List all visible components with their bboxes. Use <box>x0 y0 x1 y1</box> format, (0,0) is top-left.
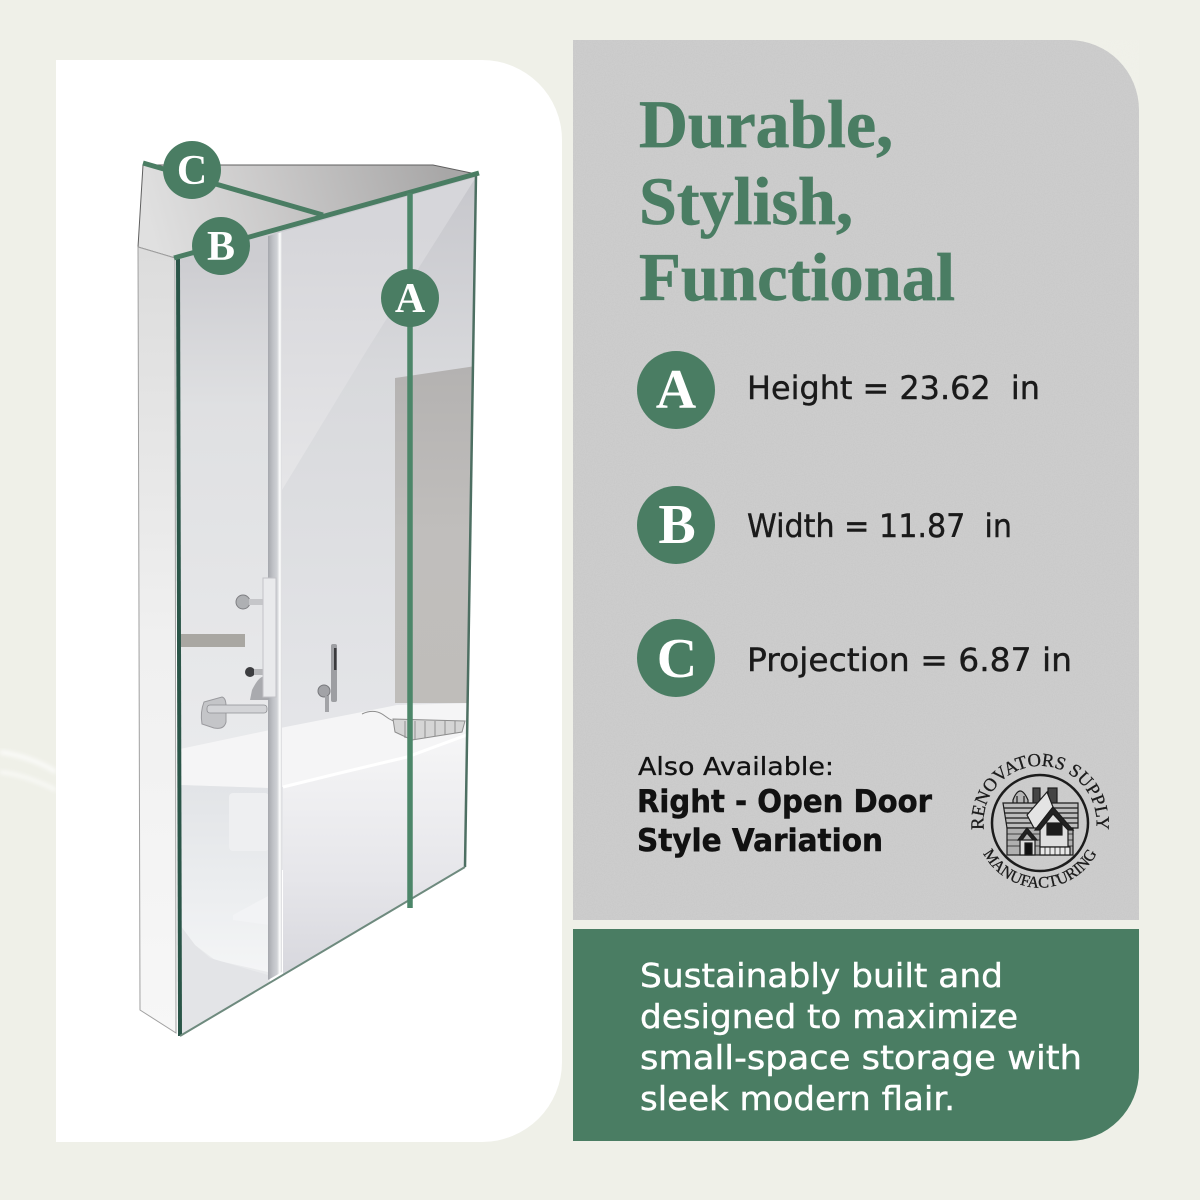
spec: width: B <box>658 494 696 556</box>
reflected fixtures <box>201 595 337 728</box>
spec: height: Height = 23.62 in <box>747 369 1040 407</box>
dimension lines and markers <box>143 141 479 908</box>
panel: product image <box>56 60 562 1142</box>
spec: height: A <box>656 359 697 421</box>
spec: width: Width = 11.87 in <box>747 507 1012 545</box>
reflected towel bar <box>180 634 245 647</box>
line A <box>407 193 413 908</box>
spec: projection: C <box>657 628 697 690</box>
marker B <box>192 217 250 275</box>
line C <box>143 163 323 215</box>
cabinet side panel <box>138 247 176 1033</box>
reflected bathtub <box>180 703 472 788</box>
logo: Renovators Supply Manufacturing <box>971 754 1109 888</box>
marker C <box>163 141 221 199</box>
logo: Renovators Supply Manufacturing: RENOVATORS SUPPLY <box>971 754 1109 830</box>
callout text: small-space storage with <box>640 1038 1082 1077</box>
marker B: B <box>207 224 235 270</box>
heading: Durable, <box>639 86 893 162</box>
background wisps <box>0 752 56 790</box>
callout text: Sustainably built and <box>640 956 1003 995</box>
callout text: designed to maximize <box>640 997 1018 1036</box>
also available note <box>637 752 933 859</box>
reflected tile wall <box>395 366 476 703</box>
marker A: A <box>395 276 426 322</box>
spec: projection <box>637 619 1072 697</box>
also available note: Style Variation <box>637 823 883 859</box>
mirror edges <box>178 175 476 1036</box>
marker C: C <box>177 148 207 194</box>
line B <box>174 173 479 258</box>
mirrored doors <box>180 170 476 1040</box>
reflected canister <box>229 793 268 828</box>
door seam <box>268 232 282 980</box>
spec: height <box>637 351 1040 429</box>
panel: sustainability callout <box>573 929 1139 1141</box>
reflected basket <box>362 711 465 740</box>
house <box>1003 788 1078 855</box>
panel: specifications <box>573 40 1139 920</box>
cabinet top surface <box>138 165 476 258</box>
spec: projection: Projection = 6.87 in <box>747 641 1072 679</box>
also available note: Also Available: <box>638 752 834 781</box>
heading <box>639 86 955 315</box>
heading: Stylish, <box>639 163 853 239</box>
callout text: sleek modern flair. <box>640 1079 955 1118</box>
logo: Renovators Supply Manufacturing: MANUFACTURING <box>983 848 1096 888</box>
also available note: Right - Open Door <box>637 784 933 820</box>
marker A <box>381 269 439 327</box>
spec: width <box>637 486 1012 564</box>
reflected step <box>233 895 270 925</box>
callout text <box>640 956 1082 1118</box>
heading: Functional <box>639 239 955 315</box>
